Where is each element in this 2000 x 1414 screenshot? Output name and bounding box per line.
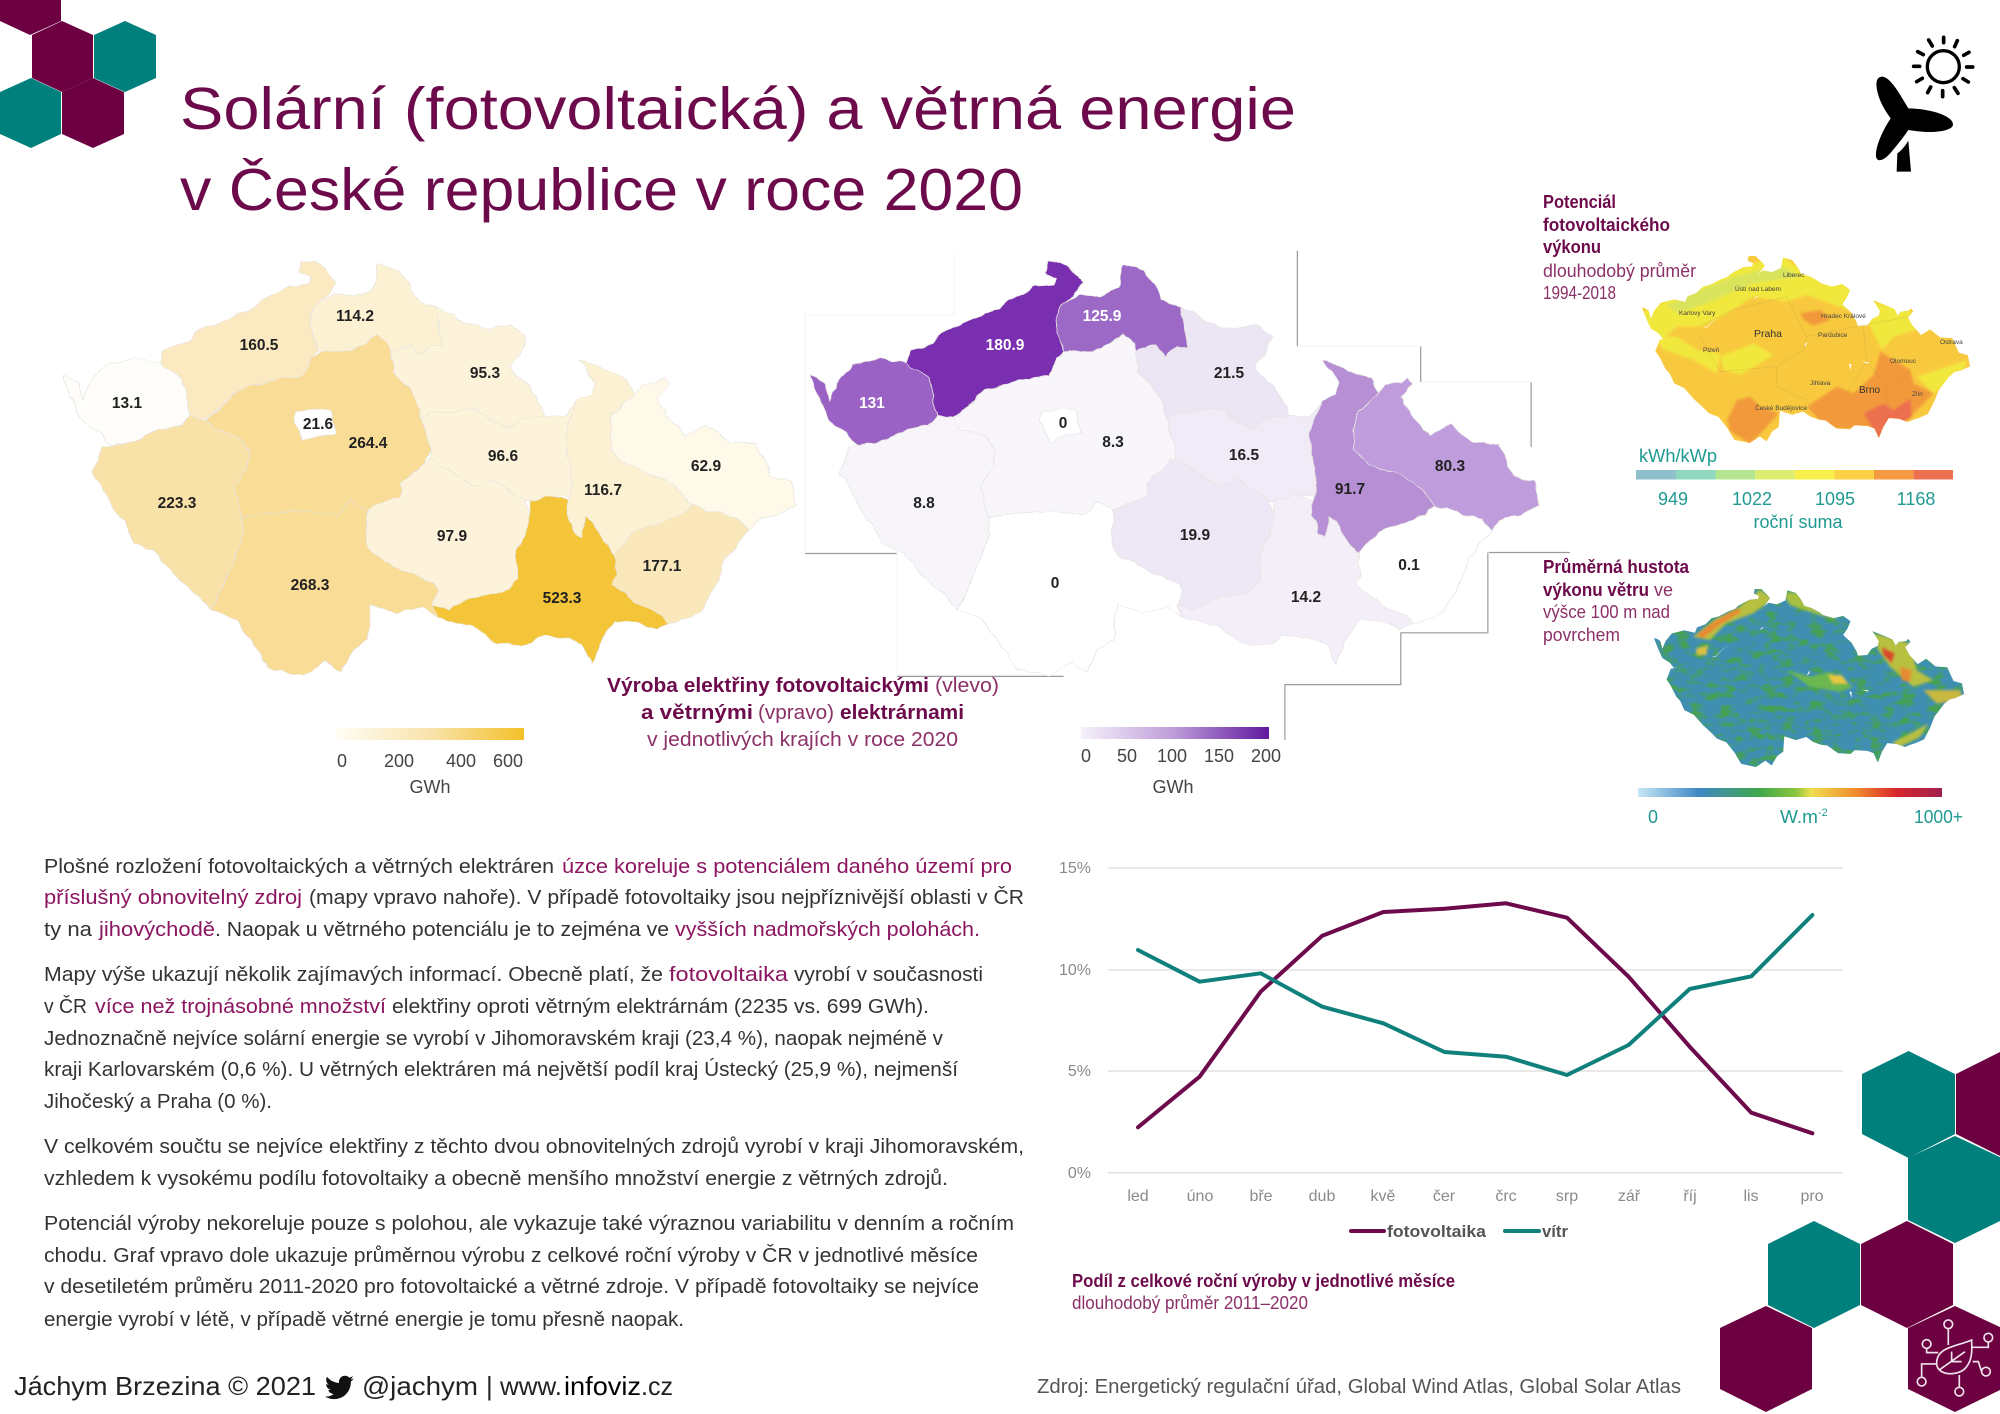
x axis month labels — [1127, 1188, 1824, 1205]
maps caption: (vlevo) — [935, 675, 999, 697]
heading: wind power density: výšce 100 m nad — [1543, 602, 1670, 622]
solar map value labels: 268.3 — [291, 577, 330, 594]
map city labels: Liberec — [1783, 272, 1805, 279]
footer: author and links: | — [486, 1371, 493, 1401]
choropleth map: wind generation by region — [810, 261, 1539, 676]
solar map value labels: 116.7 — [584, 482, 622, 499]
wind map value labels: 14.2 — [1291, 589, 1321, 606]
body text: paragraph 3: V celkovém součtu se nejvíce elektřiny z těchto dvou obnovitelných zdrojů vyrobí v kraji Jihomoravském, — [44, 1136, 1024, 1158]
body text: paragraph 2: více než trojnásobné množství — [95, 996, 386, 1018]
wind map legend: 0 — [1081, 746, 1091, 766]
wind density legend: 0 — [1648, 807, 1658, 827]
map city labels: Praha — [1754, 328, 1782, 340]
map city labels: Zlín — [1912, 391, 1923, 398]
x axis month labels: úno — [1187, 1188, 1213, 1205]
x axis month labels: dub — [1309, 1188, 1335, 1205]
body text: paragraph 1: (mapy vpravo nahoře). V případě fotovoltaiky jsou nejpříznivější oblasti v ČR — [309, 886, 1024, 909]
wind map legend: 100 — [1157, 746, 1187, 766]
x axis month labels: kvě — [1371, 1188, 1396, 1205]
x axis month labels: led — [1127, 1188, 1149, 1205]
solar map value labels: 21.6 — [303, 416, 333, 433]
map city labels — [1679, 272, 1963, 412]
body text: paragraph 1: jihovýchodě — [98, 919, 215, 941]
heading: solar potential: 1994-2018 — [1543, 283, 1616, 303]
footer: author and links: .cz — [641, 1371, 673, 1401]
wind map legend: 150 — [1204, 746, 1234, 766]
map city labels: Brno — [1859, 385, 1881, 396]
solar map value labels: 264.4 — [349, 435, 388, 452]
heading: solar potential: Potenciál — [1543, 192, 1616, 212]
x axis month labels: říj — [1683, 1188, 1697, 1205]
solar map value labels: 13.1 — [112, 395, 142, 412]
x axis month labels: bře — [1249, 1188, 1273, 1205]
wind density legend: -2 — [1818, 807, 1828, 819]
solar map value labels: 95.3 — [470, 365, 500, 382]
solar map value labels: 97.9 — [437, 528, 467, 545]
solar map legend — [335, 728, 524, 797]
title: v České republice v roce 2020 — [180, 157, 1023, 223]
map city labels: Ostrava — [1940, 339, 1963, 346]
solar map legend: 600 — [493, 751, 523, 771]
maps caption: elektrárnami — [840, 702, 964, 724]
body text: paragraph 2: elektřiny oproti větrným elektrárnám (2235 vs. 699 GWh). — [392, 996, 929, 1018]
y axis labels: 5% — [1068, 1063, 1091, 1080]
wind map legend: 50 — [1117, 746, 1137, 766]
solar map value labels: 523.3 — [543, 590, 582, 607]
heading: wind power density: Průměrná hustota — [1543, 557, 1690, 577]
wind map value labels — [859, 308, 1465, 606]
decorative hexagons bottom right — [1720, 1051, 2000, 1412]
heading: solar potential — [1543, 192, 1696, 303]
chart caption: Podíl z celkové roční výroby v jednotlivé měsíce — [1072, 1271, 1455, 1291]
x axis month labels: zář — [1618, 1188, 1641, 1205]
wind map value labels: 91.7 — [1335, 481, 1365, 498]
map city labels: Karlovy Vary — [1679, 310, 1716, 317]
x axis month labels: lis — [1743, 1188, 1759, 1205]
icon: leaf with network nodes — [1917, 1320, 1993, 1396]
maps caption — [607, 675, 999, 751]
body text: paragraph 1: vyšších nadmořských polohách. — [675, 919, 980, 941]
solar potential legend: 1022 — [1732, 489, 1772, 509]
line chart: monthly share of annual generation — [1059, 860, 1843, 1241]
body text: paragraph 4: energie vyrobí v létě, v případě větrné energie je tomu přesně naopak. — [44, 1309, 684, 1331]
maps caption: Výroba elektřiny fotovoltaickými — [607, 675, 929, 697]
heading: wind power density: výkonu větru — [1543, 580, 1649, 600]
solar potential legend: 1095 — [1815, 489, 1855, 509]
solar map legend: 0 — [337, 751, 347, 771]
y axis labels — [1059, 860, 1091, 1182]
solar map value labels: 160.5 — [240, 337, 279, 354]
y axis labels: 10% — [1059, 962, 1091, 979]
solar potential legend: roční suma — [1753, 512, 1843, 532]
maps caption: (vpravo) — [758, 702, 834, 724]
footer: data sources: Zdroj: Energetický regulační úřad, Global Wind Atlas, Global Solar Atlas — [1037, 1376, 1681, 1398]
map city labels: Hradec Králové — [1821, 313, 1866, 320]
wind map value labels: 0 — [1051, 575, 1059, 592]
body text: paragraph 1: úzce koreluje s potenciálem daného území pro — [562, 856, 1012, 878]
chart legend: fotovoltaika — [1387, 1222, 1487, 1241]
body text: paragraph 2: Mapy výše ukazují několik zajímavých informací. Obecně platí, že — [44, 964, 663, 986]
body text: paragraph 2: Jednoznačně nejvíce solární energie se vyrobí v Jihomoravském kraji (23,4 %), naopak nejméně v — [44, 1028, 943, 1050]
wind density legend: 1000+ — [1914, 807, 1963, 827]
chart caption: dlouhodobý průměr 2011–2020 — [1072, 1293, 1308, 1313]
body text: paragraph 2: kraji Karlovarském (0,6 %). U větrných elektráren má největší podíl kraj Ústecký (25,9 %), nejmenší — [44, 1058, 958, 1081]
footer: author and links — [14, 1371, 673, 1401]
solar potential legend — [1636, 446, 1953, 532]
map city labels: Plzeň — [1703, 347, 1720, 354]
map city labels: Jihlava — [1810, 380, 1831, 387]
solar map legend: 200 — [384, 751, 414, 771]
series: wind — [1138, 915, 1812, 1075]
body text: paragraph 1 — [44, 856, 1024, 941]
body text: paragraph 1: . Naopak u větrného potenciálu je to zejména ve — [215, 919, 669, 941]
maps caption: a větrnými — [641, 702, 753, 724]
wind map value labels: 19.9 — [1180, 527, 1210, 544]
maps caption: v jednotlivých krajích v roce 2020 — [647, 729, 958, 751]
x axis month labels: črc — [1495, 1188, 1517, 1205]
footer: author and links: www. — [499, 1371, 562, 1401]
map city labels: Ústí nad Labem — [1735, 284, 1781, 293]
icon: wind turbine and sun — [1876, 37, 1973, 172]
solar map value labels: 114.2 — [336, 308, 374, 325]
title — [180, 76, 1296, 223]
y axis labels: 15% — [1059, 860, 1091, 877]
map: wind power density raster — [1654, 589, 1964, 767]
wind map value labels: 0.1 — [1398, 557, 1420, 574]
solar map value labels: 96.6 — [488, 448, 518, 465]
map city labels: Pardubice — [1818, 332, 1848, 339]
chart legend — [1351, 1222, 1568, 1241]
solar map value labels: 62.9 — [691, 458, 721, 475]
stray frame lines around wind map — [805, 251, 1570, 740]
body text: paragraph 1: ty na — [44, 919, 93, 941]
solar map value labels: 223.3 — [158, 495, 197, 512]
decorative hexagons top left — [0, 0, 156, 148]
body text: paragraph 1: příslušný obnovitelný zdroj — [44, 887, 302, 909]
wind density legend: W.m — [1780, 807, 1818, 827]
body text: paragraph 1: Plošné rozložení fotovoltaických a větrných elektráren — [44, 856, 554, 878]
wind map value labels: 8.3 — [1102, 434, 1124, 451]
wind map value labels: 21.5 — [1214, 365, 1244, 382]
footer: author and links: infoviz — [564, 1371, 641, 1401]
solar potential legend: 949 — [1658, 489, 1688, 509]
solar potential legend: 1168 — [1897, 489, 1935, 509]
solar potential legend: kWh/kWp — [1639, 446, 1717, 466]
choropleth map: solar generation by region — [62, 261, 796, 676]
wind map value labels: 16.5 — [1229, 447, 1259, 464]
solar map legend: 400 — [446, 751, 476, 771]
body text: paragraph 2: v ČR — [44, 995, 87, 1018]
body text: paragraph 2: fotovoltaika — [669, 964, 789, 986]
heading: wind power density: ve — [1654, 580, 1673, 600]
body text: paragraph 4: v desetiletém průměru 2011-2020 pro fotovoltaické a větrné zdroje. V případě fotovoltaiky se nejvíce — [44, 1276, 979, 1298]
body text: paragraph 4: Potenciál výroby nekoreluje pouze s polohou, ale vykazuje také výraznou variabilitu v denním a ročním — [44, 1213, 1014, 1235]
title: Solární (fotovoltaická) a větrná energie — [180, 76, 1296, 142]
chart legend: vítr — [1542, 1222, 1568, 1241]
heading: wind power density: povrchem — [1543, 625, 1620, 645]
wind map value labels: 8.8 — [913, 495, 935, 512]
x axis month labels: pro — [1800, 1188, 1824, 1205]
y axis labels: 0% — [1068, 1165, 1091, 1182]
solar map legend: GWh — [409, 777, 451, 797]
icon: twitter bird — [325, 1376, 354, 1399]
series: photovoltaics — [1138, 903, 1812, 1133]
solar map value labels — [112, 308, 721, 607]
heading: solar potential: fotovoltaického — [1543, 215, 1670, 235]
wind map legend — [1081, 727, 1281, 797]
map city labels: České Budějovice — [1755, 403, 1807, 412]
map: solar potential raster — [1642, 256, 1970, 443]
chart caption — [1072, 1271, 1455, 1313]
wind map value labels: 180.9 — [986, 337, 1025, 354]
body text: paragraph 4: chodu. Graf vpravo dole ukazuje průměrnou výrobu z celkové roční výroby v ČR v jednotlivé měsíce — [44, 1244, 978, 1267]
body text: paragraph 3: vzhledem k vysokému podílu fotovoltaiky a obecně menšího množství energie z větrných zdrojů. — [44, 1168, 948, 1190]
footer: author and links: @jachym — [362, 1371, 478, 1401]
x axis month labels: čer — [1433, 1188, 1456, 1205]
heading: solar potential: dlouhodobý průměr — [1543, 261, 1696, 281]
wind map legend: 200 — [1251, 746, 1281, 766]
map city labels: Olomouc — [1890, 358, 1917, 365]
wind map legend: GWh — [1152, 777, 1194, 797]
solar map value labels: 177.1 — [643, 558, 682, 575]
wind map value labels: 80.3 — [1435, 458, 1465, 475]
wind map value labels: 0 — [1059, 415, 1067, 432]
body text: paragraph 2 — [44, 964, 983, 1113]
body text: paragraph 4 — [44, 1213, 1014, 1331]
wind map value labels: 125.9 — [1083, 308, 1122, 325]
body text: paragraph 2: vyrobí v současnosti — [794, 964, 983, 986]
body text: paragraph 3 — [44, 1136, 1024, 1190]
wind density legend — [1638, 788, 1963, 827]
wind map value labels: 131 — [859, 395, 885, 412]
heading: wind power density — [1543, 557, 1690, 645]
footer: author and links: Jáchym Brzezina © 2021 — [14, 1371, 316, 1401]
heading: solar potential: výkonu — [1543, 237, 1601, 257]
body text: paragraph 2: Jihočeský a Praha (0 %). — [44, 1091, 272, 1113]
x axis month labels: srp — [1556, 1188, 1578, 1205]
